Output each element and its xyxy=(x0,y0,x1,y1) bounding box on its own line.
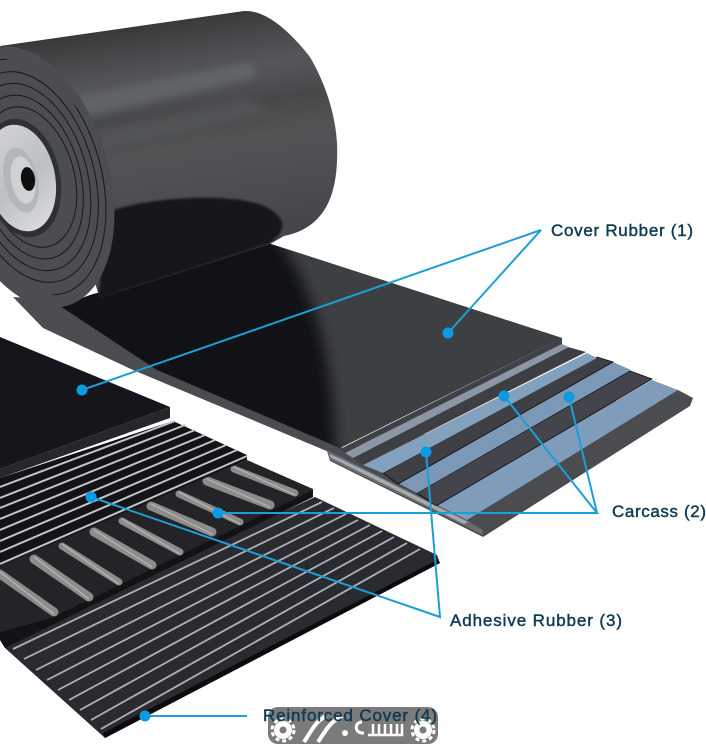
bottom ply xyxy=(327,390,693,537)
cord layer xyxy=(0,460,313,648)
steel cords xyxy=(0,469,295,612)
callout: Cover Rubber (1): Cover Rubber (1) xyxy=(551,221,693,240)
dark ply 2 xyxy=(353,347,586,465)
callout: Reinforced Cover (4) xyxy=(140,706,437,725)
unrolled sheet xyxy=(13,244,562,452)
reinforced cover layer xyxy=(5,497,440,738)
roll body xyxy=(0,11,337,300)
metal hub xyxy=(0,111,72,245)
bottom product: steel-reinforced belt xyxy=(0,337,440,738)
watermark badge xyxy=(268,707,438,744)
layered belt edge xyxy=(327,338,693,537)
top product: rolled conveyor belt xyxy=(0,11,562,452)
callout: Adhesive Rubber (3): Adhesive Rubber (3) xyxy=(450,611,622,630)
callout: Cover Rubber (1) xyxy=(76,221,693,396)
callout: Adhesive Rubber (3) xyxy=(86,446,622,630)
light strip xyxy=(345,344,569,458)
top cover layer xyxy=(0,337,170,478)
roll end face with rings xyxy=(0,46,114,307)
stepped side edge xyxy=(327,450,483,535)
blue ply 3 xyxy=(437,380,678,520)
callout: Reinforced Cover (4): Reinforced Cover (4) xyxy=(263,706,437,725)
callout: Carcass (2): Carcass (2) xyxy=(612,502,706,521)
dark ply 3 xyxy=(383,357,613,484)
dark ply 4 xyxy=(417,371,652,506)
blue ply 1 xyxy=(363,353,597,473)
top cover front edge xyxy=(340,338,562,453)
blue ply 2 xyxy=(398,362,631,493)
adhesive stripe layer xyxy=(0,421,247,566)
callout: Carcass (2) xyxy=(212,390,706,521)
